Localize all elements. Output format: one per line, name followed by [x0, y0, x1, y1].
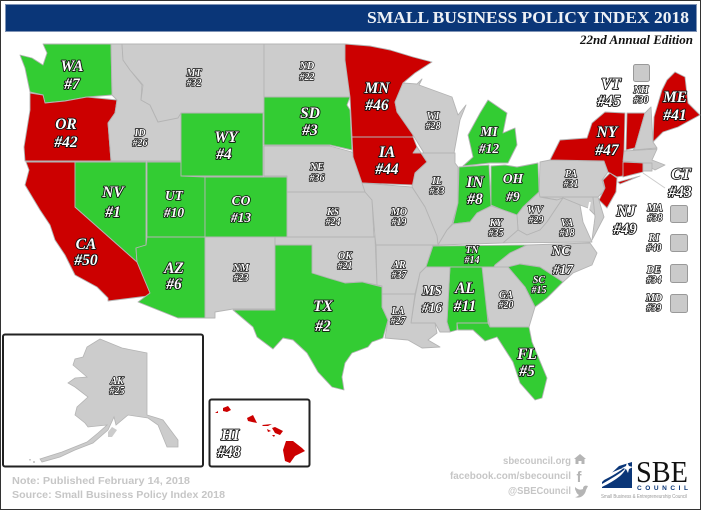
label: DE rank: #34	[646, 275, 662, 286]
label: NE: NE	[309, 162, 324, 173]
label: IN: IN	[465, 174, 484, 191]
state: NY Long Island	[618, 176, 640, 184]
state: KY	[438, 206, 518, 245]
label: OH rank: #9	[505, 189, 520, 204]
label: ID rank: #26	[132, 138, 148, 149]
label: MD: MD	[645, 293, 662, 304]
source note: Note: Published February 14, 2018	[12, 475, 190, 487]
state: IL	[412, 147, 458, 245]
state: DE and eastern shore	[592, 197, 604, 240]
state: LA	[382, 294, 440, 348]
label: CO: CO	[232, 193, 251, 208]
state: CT	[623, 162, 643, 177]
state: AR	[376, 245, 433, 294]
key square: RI	[670, 234, 688, 252]
label: NY rank: #47	[594, 142, 620, 159]
SBE Council logo	[601, 454, 688, 500]
state: ME	[653, 72, 700, 142]
state: WV	[517, 192, 563, 235]
label: NJ rank: #49	[612, 221, 637, 238]
label: WI: WI	[427, 111, 440, 122]
twitter handle: @SBECouncil	[508, 485, 571, 497]
state: IA	[352, 137, 427, 185]
label: NC: NC	[551, 243, 571, 258]
subtitle: edition: 22nd Annual Edition	[579, 32, 693, 47]
medium state labels	[163, 124, 574, 315]
label: FL: FL	[516, 346, 537, 363]
label: AR: AR	[391, 260, 406, 271]
label: MI rank: #12	[478, 141, 499, 156]
Chesapeake Bay	[588, 202, 593, 224]
label: PA: PA	[565, 169, 577, 180]
label: AZ rank: #6	[165, 276, 182, 293]
state: PA	[539, 160, 608, 197]
title banner	[6, 4, 696, 32]
state: MN	[345, 44, 432, 137]
label: SD: SD	[300, 105, 320, 122]
small-state keys and leader line	[634, 64, 688, 312]
icon: twitter	[575, 486, 588, 498]
label: KS rank: #24	[324, 217, 340, 228]
label: NH: NH	[632, 85, 650, 96]
facebook: facebook.com/sbecouncil	[450, 470, 571, 482]
label: TX rank: #2	[314, 318, 331, 335]
label: RI rank: #40	[646, 243, 662, 254]
label: NH rank: #30	[632, 95, 648, 106]
label: AK rank: #25	[108, 386, 124, 397]
label: IA: IA	[378, 144, 395, 161]
state: WA	[20, 44, 112, 103]
label: LA rank: #27	[390, 316, 406, 327]
label: OK rank: #21	[336, 261, 352, 272]
label: TX: TX	[313, 298, 334, 315]
label: NM: NM	[232, 263, 250, 274]
icon: home	[574, 454, 586, 464]
label: NV: NV	[101, 184, 125, 201]
label: CA rank: #50	[73, 252, 98, 269]
label: PA rank: #31	[562, 179, 578, 190]
state: FL	[457, 323, 547, 400]
website: sbecouncil.org	[503, 455, 571, 467]
large state labels	[53, 58, 692, 461]
state: TN	[426, 245, 527, 267]
state: IN	[453, 165, 491, 224]
state: MD	[540, 197, 595, 215]
state: OH	[491, 163, 539, 215]
label: MT: MT	[186, 68, 202, 79]
state: KS	[287, 192, 374, 237]
social links	[450, 454, 588, 498]
Hawaii inset	[210, 400, 310, 466]
label: OH: OH	[503, 171, 524, 186]
label: NY: NY	[596, 124, 619, 141]
label: SC: SC	[533, 275, 545, 286]
label: WY rank: #4	[215, 146, 232, 163]
state: UT	[147, 162, 205, 237]
label: MS: MS	[421, 283, 442, 298]
state: AL	[447, 267, 488, 332]
state: VT	[626, 113, 645, 150]
label: IL rank: #33	[428, 186, 444, 197]
label: ME: ME	[662, 89, 687, 106]
label: AZ: AZ	[163, 260, 184, 277]
label: MI: MI	[479, 124, 498, 139]
logo council: COUNCIL	[637, 485, 688, 492]
label: DE: DE	[646, 265, 661, 276]
label: HI rank: #48	[216, 444, 241, 461]
label: UT rank: #10	[163, 205, 184, 220]
label: RI: RI	[648, 233, 660, 244]
label: TN: TN	[465, 245, 479, 256]
state: VA	[503, 198, 592, 243]
label: NJ: NJ	[616, 203, 637, 220]
label: MD rank: #39	[646, 303, 662, 314]
label: ND rank: #22	[298, 72, 314, 83]
label: ID: ID	[133, 128, 146, 139]
state: GA	[482, 267, 535, 327]
label: NC rank: #17	[552, 262, 574, 277]
island: AK Kodiak	[108, 427, 117, 437]
state: SC	[508, 264, 563, 307]
state: MA	[623, 149, 665, 170]
label: VA rank: #18	[558, 228, 574, 239]
key square: NH	[634, 64, 650, 82]
label: WA: WA	[61, 58, 83, 75]
label: CA: CA	[76, 236, 96, 253]
label: MA: MA	[646, 203, 663, 214]
label: WI rank: #28	[424, 121, 440, 132]
key square: MD	[670, 294, 688, 312]
title banner: SMALL BUSINESS POLICY INDEX 2018	[367, 8, 689, 27]
label: VA: VA	[561, 218, 574, 229]
state: ND	[264, 44, 350, 97]
islands: Aleutians	[29, 459, 35, 463]
label: AL: AL	[454, 280, 475, 297]
state: MS	[411, 267, 450, 332]
label: GA: GA	[499, 290, 513, 301]
logo emblem	[602, 462, 633, 488]
state: MT	[122, 44, 264, 122]
state: TX	[233, 245, 388, 390]
state: NV	[75, 162, 146, 262]
label: WV rank: #29	[528, 215, 544, 226]
label: AR rank: #37	[390, 270, 408, 281]
label: IA rank: #44	[374, 161, 399, 178]
state: NJ	[599, 173, 617, 208]
label: NV rank: #1	[104, 204, 121, 221]
label: AK: AK	[109, 376, 125, 387]
state: MO	[362, 183, 438, 245]
state: NM	[205, 237, 275, 318]
state: SD	[264, 97, 352, 150]
label: MO: MO	[390, 207, 407, 218]
label: MO rank: #19	[390, 217, 406, 228]
islands: HI	[215, 406, 305, 463]
label: SC rank: #15	[530, 285, 546, 296]
label: MN rank: #46	[364, 97, 389, 114]
state: ID	[108, 44, 181, 161]
label: NE rank: #36	[308, 173, 324, 184]
key square: MA	[670, 206, 688, 222]
label: UT: UT	[165, 188, 184, 203]
key square: DE	[670, 264, 688, 282]
small state labels	[108, 61, 663, 397]
state: WI	[395, 79, 466, 153]
label: AL rank: #11	[453, 298, 476, 315]
label: VT rank: #45	[596, 93, 621, 110]
label: WV: WV	[527, 205, 544, 216]
Alaska inset	[3, 334, 203, 466]
label: NM rank: #23	[232, 273, 248, 284]
label: OK: OK	[338, 251, 353, 262]
label: CT: CT	[671, 166, 691, 183]
map of the contiguous states	[20, 44, 700, 400]
label: SD rank: #3	[301, 122, 318, 139]
state: CA	[25, 162, 150, 301]
source note: Source: Small Business Policy Index 2018	[12, 489, 225, 501]
label: IN rank: #8	[466, 191, 483, 208]
label: WA rank: #7	[63, 76, 81, 93]
state: OR	[24, 93, 117, 161]
state: RI	[643, 163, 652, 171]
state: AZ	[136, 237, 205, 318]
label: ND: ND	[299, 61, 314, 72]
leader line: CT	[643, 173, 665, 188]
label: GA rank: #20	[498, 300, 514, 311]
label: OR rank: #42	[53, 134, 78, 151]
label: ME rank: #41	[662, 107, 687, 124]
state: NC	[494, 243, 597, 282]
label: MT rank: #32	[186, 78, 202, 89]
label: KS: KS	[326, 207, 340, 218]
label: KY: KY	[489, 218, 503, 229]
label: TN rank: #14	[464, 255, 480, 266]
label: LA: LA	[391, 306, 405, 317]
icon: facebook: f	[576, 469, 582, 486]
logo tagline: Small Business & Entrepreneurship Council	[601, 494, 687, 500]
label: MA rank: #38	[646, 213, 662, 224]
label: CT rank: #43	[667, 184, 692, 201]
state: NE	[264, 146, 365, 192]
label: MS rank: #16	[421, 300, 442, 315]
state: AK	[40, 339, 178, 462]
label: WY: WY	[214, 129, 239, 146]
label: FL rank: #5	[518, 363, 535, 380]
state: NY	[550, 112, 625, 177]
state: CO	[205, 177, 287, 237]
state: NH	[633, 107, 657, 150]
label: HI: HI	[220, 427, 240, 444]
label: OR: OR	[55, 116, 77, 133]
label: VT: VT	[601, 76, 621, 93]
source note	[12, 475, 225, 501]
state: MI	[463, 100, 517, 166]
state: OK	[275, 237, 377, 285]
label: CO rank: #13	[230, 210, 251, 225]
label: KY rank: #35	[488, 228, 504, 239]
label: IL: IL	[431, 176, 442, 187]
label: MN: MN	[364, 80, 390, 97]
logo wordmark: SBE	[636, 454, 688, 489]
state: WY	[181, 113, 263, 176]
